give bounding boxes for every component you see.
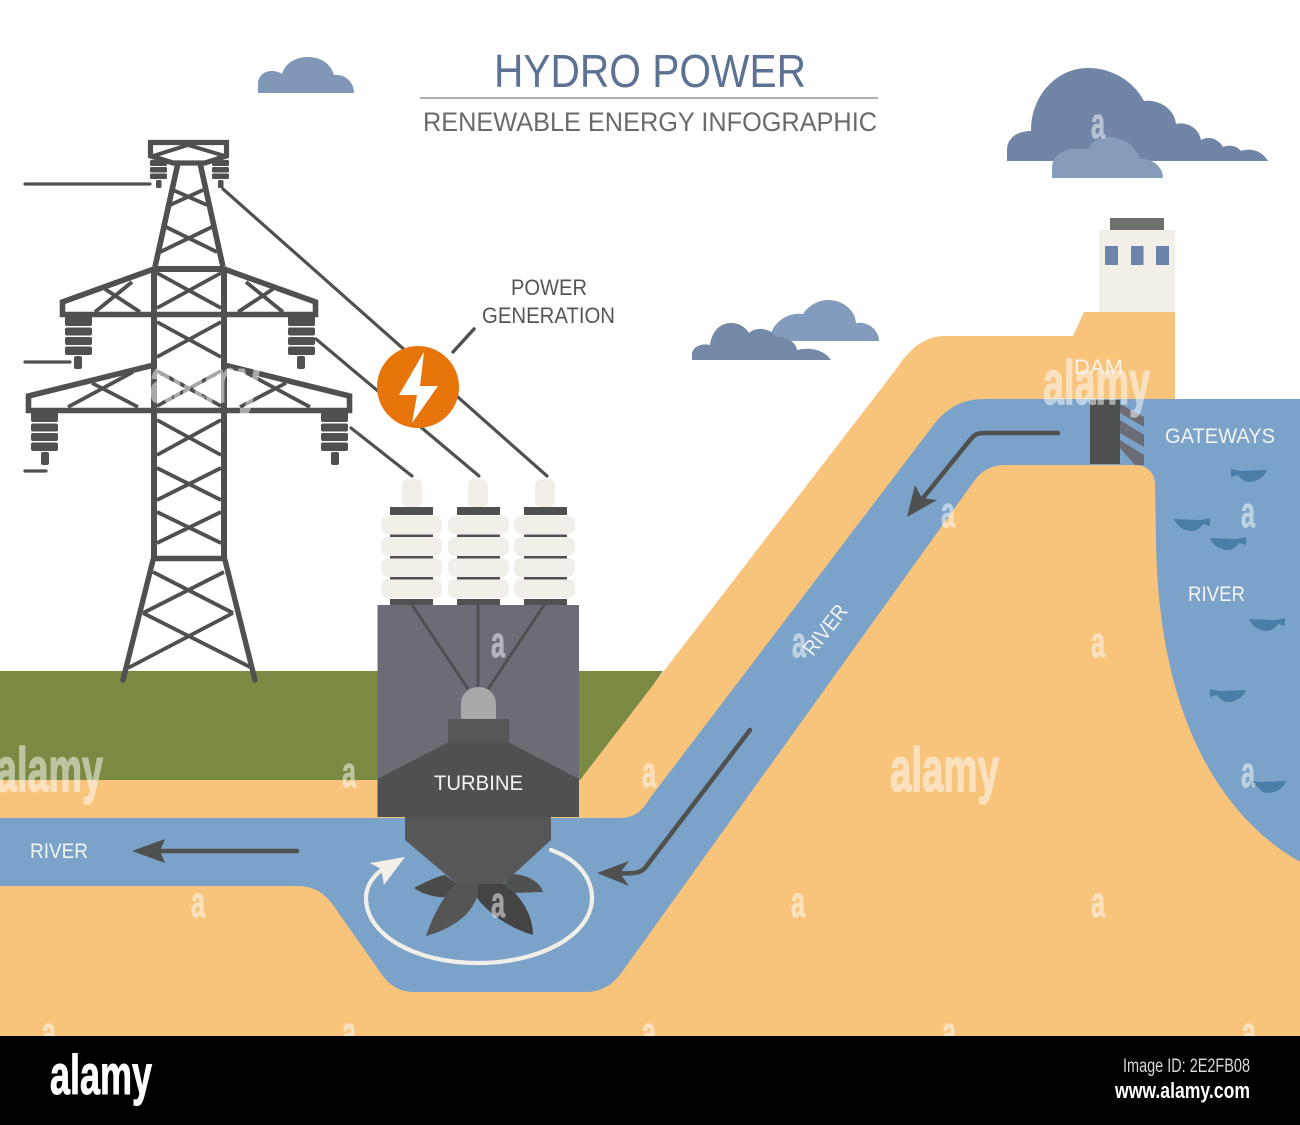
watermark: small marks: a — [342, 1008, 356, 1057]
pylon: top crossarm — [150, 142, 226, 163]
label: gateways: GATEWAYS — [1165, 425, 1275, 448]
watermark: small marks: a — [1241, 488, 1255, 537]
watermark: large wordmarks: alamy — [0, 736, 103, 805]
watermark: small marks: a — [942, 1008, 956, 1057]
watermark: large wordmarks: alamy — [1043, 349, 1150, 418]
callout leader — [453, 329, 474, 352]
watermark: small marks: a — [642, 1008, 656, 1057]
watermark: small marks: a — [491, 618, 505, 667]
pylon: upper mast bracing — [160, 190, 217, 252]
footer image id: Image ID: 2E2FB08 — [1123, 1056, 1250, 1077]
watermark: large wordmarks: alamy — [150, 347, 260, 416]
watermark: large wordmarks: alamy — [890, 736, 999, 805]
pylon: flared legs — [123, 560, 255, 680]
arrow: penstock lower — [597, 730, 750, 886]
watermark: small marks: a — [1091, 99, 1105, 148]
clouds: middle pair — [692, 300, 879, 360]
label: power generation — [482, 275, 615, 328]
bushing: left — [381, 479, 442, 605]
pylon: body bracing — [157, 273, 221, 543]
pylon: upper crossarm — [62, 269, 316, 314]
turbine housing — [378, 605, 579, 817]
footer url: www.alamy.com — [1114, 1078, 1250, 1103]
label: river left: RIVER — [30, 840, 88, 863]
watermark: small marks: a — [1091, 618, 1105, 667]
icon: power generation bolt — [377, 346, 459, 428]
watermark: large wordmarks — [0, 347, 1150, 805]
footer logo: alamy — [50, 1043, 152, 1106]
watermark: small marks: a — [791, 878, 805, 927]
cloud: large storm cloud — [1007, 68, 1268, 178]
pylon: main body — [154, 267, 224, 560]
watermark: small marks — [42, 99, 1256, 1057]
arrow: rotation — [366, 850, 592, 963]
watermark: small marks: a — [491, 878, 505, 927]
ground: green field — [0, 671, 663, 790]
arrow: penstock upper — [907, 433, 1058, 517]
fish school — [1174, 469, 1286, 793]
river — [0, 399, 1300, 992]
pylon: insulators — [31, 160, 348, 465]
label: river right: RIVER — [1188, 583, 1245, 606]
title: HYDRO POWER — [494, 45, 806, 97]
bushing: right — [514, 479, 575, 605]
arrow: river flow left — [132, 839, 297, 863]
turbine shaft cone — [405, 817, 551, 884]
watermark: small marks: a — [342, 748, 356, 797]
turbine blades — [414, 874, 543, 936]
watermark: small marks: a — [1242, 1008, 1256, 1057]
watermark: small marks: a — [191, 878, 205, 927]
label: power generation: POWER — [511, 275, 587, 300]
label: turbine: TURBINE — [434, 772, 523, 795]
pylon: lower crossarm — [28, 365, 350, 410]
watermark: small marks: a — [1241, 748, 1255, 797]
watermark: small marks: a — [42, 1008, 56, 1057]
watermark: small marks: a — [1091, 878, 1105, 927]
dam gate — [1090, 400, 1144, 465]
pylon: upper mast — [155, 163, 223, 267]
label: power generation: GENERATION — [482, 303, 615, 328]
footer band — [0, 1036, 1300, 1125]
watermark: small marks: a — [642, 748, 656, 797]
watermark: small marks: a — [941, 488, 955, 537]
label: river on slope: RIVER — [799, 600, 853, 660]
label: dam: DAM — [1074, 356, 1123, 379]
watermark: small marks: a — [792, 618, 806, 667]
ground: sand hills — [0, 312, 1300, 1036]
powerhouse on dam — [1099, 218, 1175, 312]
bushing: centre — [448, 479, 509, 605]
transmission wires — [25, 184, 547, 476]
transformer bushings — [381, 479, 575, 605]
subtitle: RENEWABLE ENERGY INFOGRAPHIC — [423, 107, 877, 137]
cloud: top small — [258, 57, 354, 93]
pylon — [28, 142, 350, 680]
